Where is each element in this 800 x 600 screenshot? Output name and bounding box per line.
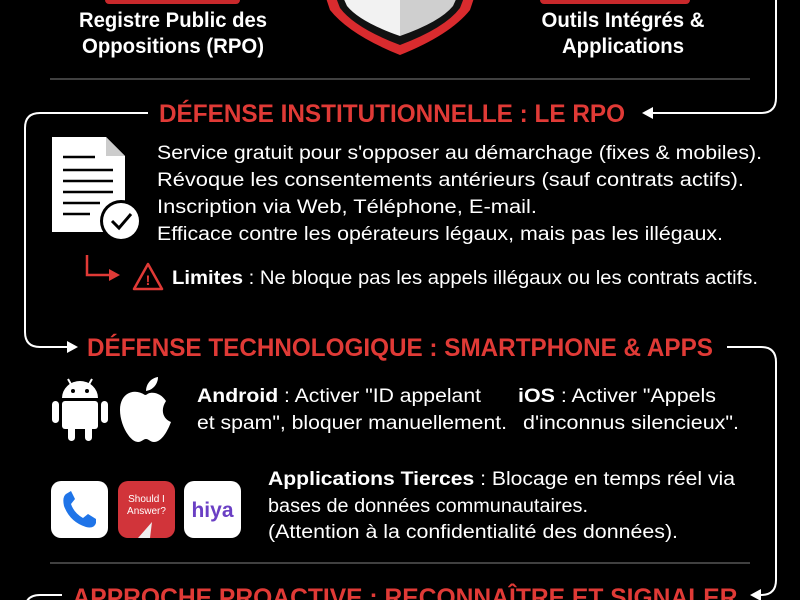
RPO description text — [157, 143, 762, 245]
icon: should i answer: Answer? — [127, 506, 166, 517]
icon: should i answer: Should I — [128, 494, 165, 505]
third party apps text: Applications Tierces : Blocage en temps réel via — [268, 469, 735, 490]
third party apps text: bases de données communautaires. — [268, 496, 588, 517]
third party apps text — [268, 469, 735, 543]
top right label: Outils Intégrés & — [542, 9, 704, 32]
limits callout — [87, 255, 758, 289]
third party apps text: (Attention à la confidentialité des données). — [268, 522, 678, 543]
RPO description text: Révoque les consentements antérieurs (sauf contrats actifs). — [157, 170, 744, 191]
icon: android — [52, 379, 108, 441]
limits callout: ! — [146, 272, 150, 288]
icon: hiya — [184, 481, 241, 538]
top left label: Registre Public des — [79, 9, 267, 32]
RPO description text: Efficace contre les opérateurs légaux, mais pas les illégaux. — [157, 224, 723, 245]
iOS text: iOS : Activer "Appels — [518, 386, 716, 407]
RPO description text: Service gratuit pour s'opposer au démarchage (fixes & mobiles). — [157, 143, 762, 164]
icon: phone app — [51, 481, 108, 538]
top left label — [79, 0, 267, 58]
icon: hiya: hiya — [191, 499, 234, 522]
top right label: Applications — [562, 35, 684, 58]
android text: et spam", bloquer manuellement. — [197, 413, 507, 434]
android text: Android : Activer "ID appelant — [197, 386, 482, 407]
connector arrow 1 — [642, 0, 776, 119]
limits callout: Limites : Ne bloque pas les appels illégaux ou les contrats actifs. — [172, 268, 758, 289]
android text — [197, 386, 507, 434]
heading: institutional defence: DÉFENSE INSTITUTIONNELLE : LE RPO — [159, 99, 625, 128]
icon: apple — [120, 377, 171, 442]
icon: document with check — [52, 137, 142, 242]
connector arrow 3 — [727, 347, 776, 600]
iOS text: d'inconnus silencieux". — [523, 413, 739, 434]
iOS text — [518, 386, 739, 434]
shield icon — [325, 0, 475, 55]
heading: technological defence: DÉFENSE TECHNOLOGIQUE : SMARTPHONE & APPS — [87, 333, 713, 362]
top right label — [540, 0, 704, 58]
connector arrow 2 — [25, 113, 148, 353]
icon: should i answer — [118, 481, 175, 538]
top left label: Oppositions (RPO) — [82, 35, 264, 58]
connector line 4 — [25, 595, 62, 600]
RPO description text: Inscription via Web, Téléphone, E-mail. — [157, 197, 537, 218]
